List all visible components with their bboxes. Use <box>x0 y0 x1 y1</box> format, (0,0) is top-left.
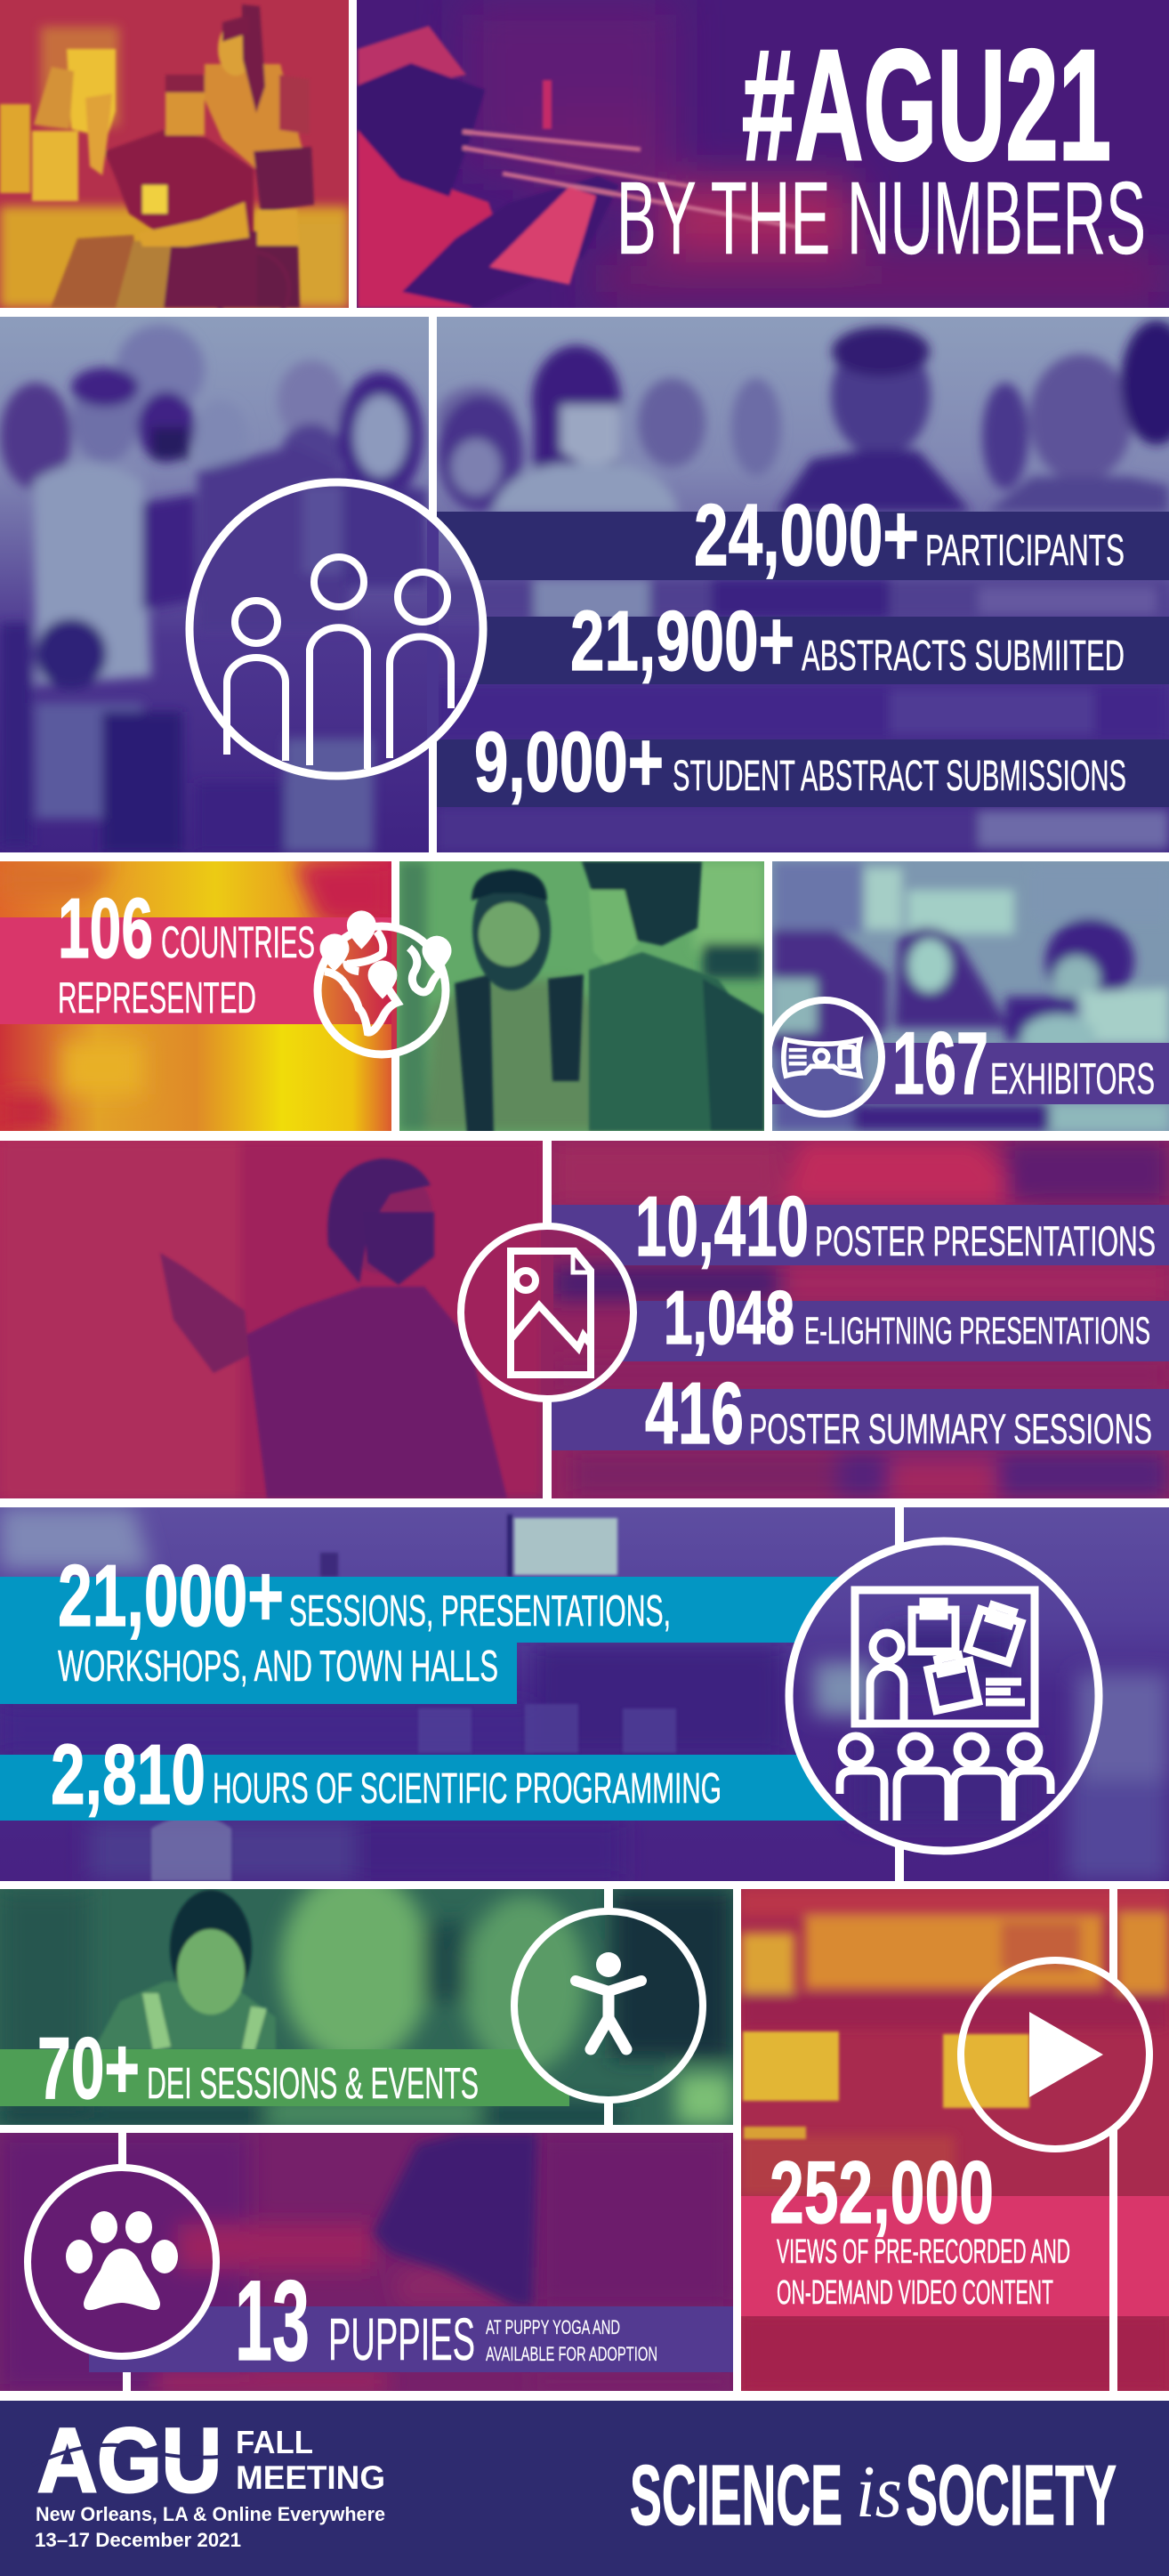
logo: AGU Fall Meeting: AGU <box>37 2410 222 2511</box>
stat: 13 puppies: PUPPIES <box>328 2306 475 2373</box>
panel: two men green photo <box>399 861 764 1135</box>
stat: 167 exhibitors <box>892 1013 1155 1112</box>
stat: 2,810 <box>51 1727 722 1822</box>
banner: summary sessions <box>552 1389 1169 1450</box>
stat: 252,000 <box>770 2143 1070 2312</box>
panel: flame texture photo <box>0 861 391 1131</box>
icon: globe with pins <box>318 910 451 1054</box>
stat: 10,410: 10,410 <box>635 1179 809 1274</box>
banner: participants <box>437 512 1169 580</box>
panel: poster presenter photo <box>0 1141 543 1498</box>
panel: session room photo <box>0 1507 1169 1881</box>
stat: 13 puppies: AVAILABLE FOR ADOPTION <box>486 2343 657 2365</box>
photo bridging inside globe circle <box>391 931 399 1050</box>
stat: 70+ <box>37 2019 479 2117</box>
stat: 1,048: 1,048 <box>664 1276 794 1361</box>
icon: paw print <box>28 2168 216 2356</box>
stat: 106 countries: REPRESENTED <box>58 974 256 1022</box>
stat: 21,000+: 21,000+ <box>58 1546 284 1644</box>
stat: 70+: DEI SESSIONS & EVENTS <box>147 2060 479 2108</box>
banner: e-lightning <box>552 1301 1169 1361</box>
panel: exhibit hall photo <box>772 861 1169 1131</box>
panel: sign language speaker photo <box>0 1869 733 2125</box>
stat: 70+: 70+ <box>37 2019 140 2117</box>
panel: header trumpet photo <box>357 0 1169 308</box>
banner: views <box>741 2196 1169 2316</box>
panel: crowd photo left <box>0 317 429 852</box>
text: location and dates: 13–17 December 2021 <box>35 2529 241 2551</box>
icon: people in circle <box>189 482 483 776</box>
divider: puppy panel top <box>118 2133 126 2168</box>
divider: row 5 <box>895 1507 904 1881</box>
banner: poster presentations <box>552 1205 1169 1265</box>
divider: plenary panel <box>1109 1889 1117 2391</box>
banner: countries <box>0 917 391 1024</box>
banner: sessions line two <box>0 1643 517 1704</box>
stat: 13 puppies <box>235 2257 657 2385</box>
stat: 252,000: 252,000 <box>770 2143 994 2241</box>
banner: hours <box>0 1755 854 1821</box>
logo: AGU Fall Meeting: MEETING <box>236 2459 385 2496</box>
banner: DEI <box>0 2049 569 2106</box>
panel: puppy photo <box>0 2133 733 2391</box>
panel: plenary hall photo <box>741 1889 1169 2391</box>
logo: AGU Fall Meeting <box>32 2410 385 2511</box>
stat: 416 <box>645 1364 1152 1462</box>
slogan: science is society: is <box>856 2451 902 2533</box>
stat: 2,810: HOURS OF SCIENTIFIC PROGRAMMING <box>213 1765 722 1813</box>
text: location and dates: New Orleans, LA & Online Everywhere <box>36 2503 385 2525</box>
panel: poster hall photo <box>552 1141 1169 1498</box>
slogan: science is society: SCIENCE <box>630 2448 842 2543</box>
stat: 1,048 <box>664 1276 1150 1361</box>
icon: play button <box>961 1960 1149 2149</box>
stat: 21,000+: WORKSHOPS, AND TOWN HALLS <box>58 1643 498 1691</box>
divider: accessibility panel <box>604 1889 613 2125</box>
photo bridging inside people circle <box>427 519 439 739</box>
banner: sessions line one <box>0 1577 854 1643</box>
footer band <box>0 2401 1169 2576</box>
stat: 416: 416 <box>645 1364 744 1462</box>
icon: presentation room <box>789 1541 1099 1851</box>
stat: 21,900+ abstracts: 21,900+ <box>570 594 794 689</box>
stat: 106 countries: COUNTRIES <box>161 917 315 967</box>
logo: AGU Fall Meeting: FALL <box>236 2424 313 2460</box>
icon: accessibility figure <box>514 1911 703 2100</box>
text: location and dates <box>35 2503 385 2551</box>
icon: exhibit booth <box>768 1000 882 1114</box>
stat: 2,810: 2,810 <box>51 1727 206 1822</box>
panel: wheelchair photo <box>0 0 349 327</box>
banner: puppies <box>89 2306 733 2372</box>
panel: crowd photo right <box>436 317 1169 852</box>
stat: 10,410 <box>635 1179 1156 1274</box>
divider: puppy panel bottom <box>123 2358 131 2391</box>
icon: poster image <box>461 1226 633 1399</box>
stat: 24,000+ participants: 24,000+ <box>694 486 919 584</box>
stat: 13 puppies: AT PUPPY YOGA AND <box>486 2316 620 2338</box>
stat: 106 countries: 106 <box>58 881 153 976</box>
stat: 21,000+: SESSIONS, PRESENTATIONS, <box>289 1587 671 1635</box>
stat: 167 exhibitors: 167 <box>892 1013 988 1112</box>
banner: abstracts <box>437 617 1169 684</box>
banner: student abstracts <box>437 739 1169 807</box>
stat: 106 countries <box>58 881 315 1022</box>
stat: 13 puppies: 13 <box>235 2257 310 2385</box>
stat: 21,900+ abstracts <box>570 594 1125 689</box>
banner: exhibitors <box>772 1043 1169 1104</box>
photo bridging inside poster circle <box>541 1226 553 1399</box>
stat: 9,000+ student: 9,000+ <box>474 715 664 810</box>
stat: 9,000+ student <box>474 715 1126 810</box>
stat: 21,000+ <box>58 1546 671 1691</box>
